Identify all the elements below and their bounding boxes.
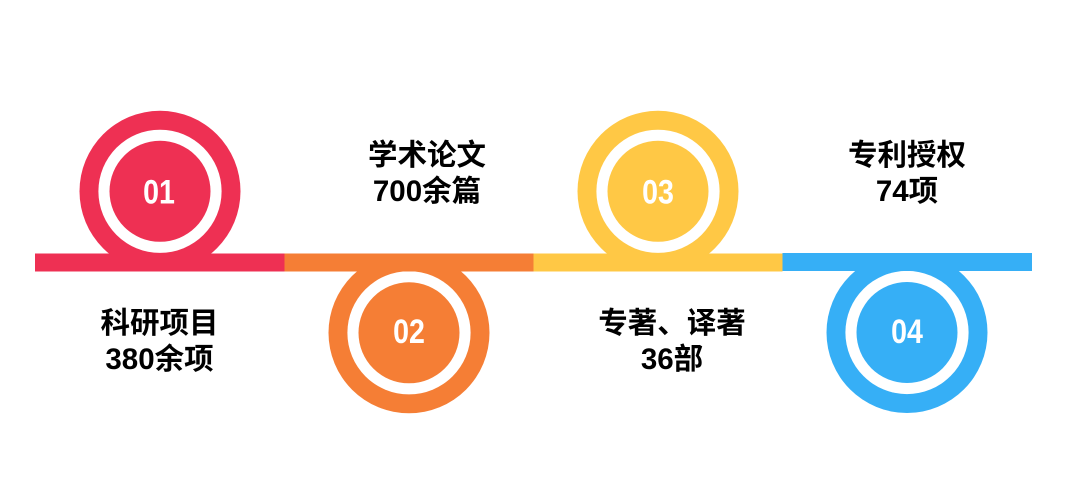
label 04: 74项: [876, 175, 938, 208]
label 03: 专著、译著: [598, 307, 746, 340]
circle 03: [578, 110, 738, 254]
circle 02: 02: [393, 313, 425, 351]
label 01: 科研项目: [100, 307, 219, 340]
infographic: four-step timeline: [35, 110, 1032, 414]
circle 04: 04: [891, 313, 923, 351]
label 01: 380余项: [105, 343, 214, 376]
step 02: academic papers: [284, 139, 534, 413]
step 01: research projects: [35, 111, 285, 376]
label 02: 学术论文: [368, 139, 486, 172]
circle 04: [826, 271, 988, 413]
circle 01: [80, 110, 240, 254]
circle 02: [328, 272, 490, 414]
timeline bar 04: [782, 253, 1032, 271]
circle 03: 03: [642, 173, 674, 211]
step 03: monographs and translations: [534, 111, 782, 376]
circle 01: 01: [143, 173, 175, 211]
label 02: 700余篇: [373, 175, 481, 208]
timeline bar 03: [534, 254, 782, 272]
timeline bar 02: [284, 254, 534, 272]
label 04: 专利授权: [848, 139, 966, 172]
timeline bar 01: [35, 254, 285, 272]
step 04: patents: [782, 139, 1032, 413]
label 03: 36部: [641, 343, 703, 376]
